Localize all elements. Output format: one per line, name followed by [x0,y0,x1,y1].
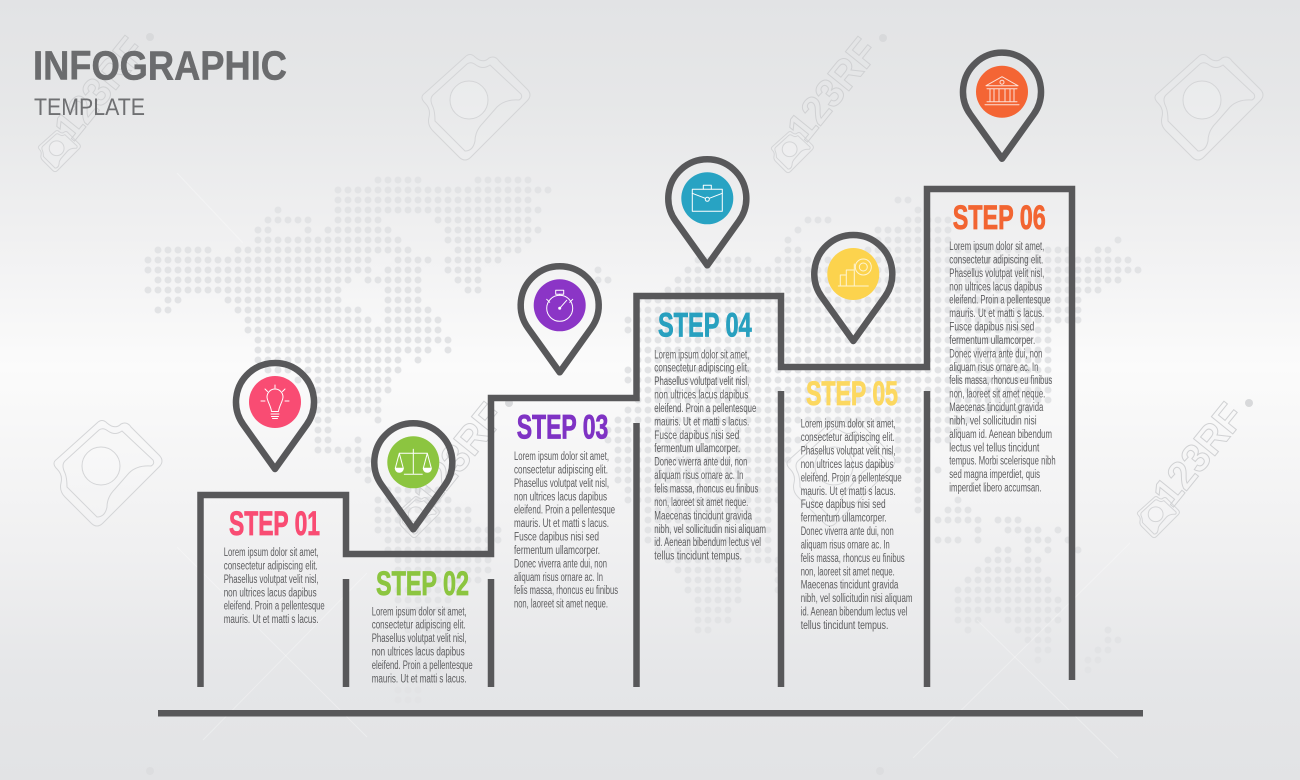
text: step 05 body: non ultrices lacus dapibus [801,459,894,471]
text: step 04 body: id. Aenean bibendum lectus vel [654,537,761,549]
text: step 04 body: tellus tincidunt tempus. [654,551,742,563]
heading: step 05: STEP 05 [806,375,898,413]
watermark: 123RF [1145,395,1253,515]
text: step 05 body: Maecenas tincidunt gravida [801,580,899,592]
heading: step 02: STEP 02 [376,565,469,603]
panel: step 03 [514,408,618,611]
heading: step 03: STEP 03 [517,408,608,446]
text: step 04 body: nibh, vel sollicitudin nisi aliquam [654,524,766,536]
text: step 06 body: tempus. Morbi scelerisque nibh [949,456,1056,468]
text: step 01 body [224,547,325,626]
text: step 06 body: Fusce dapibus nisi sed [949,322,1034,334]
text: step 05 body: id. Aenean bibendum lectus vel [801,607,907,619]
text: step 01 body: eleifend. Proin a pellentesque [224,601,325,613]
heading: infographic: INFOGRAPHIC [33,42,287,88]
text: step 02 body: eleifend. Proin a pellentesque [372,660,473,672]
text: step 01 body: consectetur adipiscing elit. [224,560,318,572]
text: step 05 body: non, laoreet sit amet neque. [801,566,895,578]
text: step 04 body: aliquam risus ornare ac. In [654,470,743,482]
text: step 04 body: Lorem ipsum dolor sit amet, [654,349,749,361]
text: step 06 body: fermentum ullamcorper. [949,335,1035,347]
pin: step 03 stopwatch [521,266,599,372]
text: step 03 body: Fusce dapibus nisi sed [514,532,599,544]
text: step 03 body: aliquam risus ornare ac. In [514,572,603,584]
text: step 04 body: felis massa, rhoncus eu finibus [654,484,758,496]
text: step 06 body: consectetur adipiscing elit. [949,254,1043,266]
text: step 06 body: aliquam risus ornare ac. In [949,362,1038,374]
pin: step 01 lightbulb [236,363,314,469]
text: step 06 body: non ultrices lacus dapibus [949,281,1042,293]
heading: step 06: STEP 06 [953,199,1046,237]
text: step 05 body: Lorem ipsum dolor sit amet, [801,419,896,431]
panel: step 01 [224,505,325,626]
text: step 06 body: non, laoreet sit amet neque. [949,389,1045,401]
text: step 06 body: Maecenas tincidunt gravida [949,402,1044,414]
panel: step 04 [654,307,766,563]
text: step 01 body: mauris. Ut et matti s lacus. [224,614,319,626]
pin: step 05 growth chart [814,235,892,341]
text: step 03 body: fermentum ullamcorper. [514,545,600,557]
text: step 02 body: Lorem ipsum dolor sit amet, [372,606,467,618]
text: step 05 body: felis massa, rhoncus eu finibus [801,553,905,565]
text: step 05 body: aliquam risus ornare ac. In [801,540,890,552]
text: step 05 body: eleifend. Proin a pellentesque [801,472,902,484]
text: step 04 body: Maecenas tincidunt gravida [654,510,752,522]
icon: stopwatch [547,290,573,321]
text: step 03 body [514,451,618,611]
text: step 02 body [372,606,473,685]
text: step 05 body: nibh, vel sollicitudin nisi aliquam [801,593,912,605]
text: step 06 body: mauris. Ut et matti s lacus. [949,308,1044,320]
text: step 03 body: mauris. Ut et matti s lacus. [514,518,609,530]
text: step 04 body: consectetur adipiscing elit. [654,363,749,375]
icon: balance scales [395,449,431,474]
text: step 01 body: Phasellus volutpat velit nisl, [224,574,319,586]
text: step 05 body: tellus tincidunt tempus. [801,620,888,632]
text: step 03 body: non, laoreet sit amet neque. [514,599,608,611]
heading: step 01: STEP 01 [229,505,320,543]
icon: briefcase [692,185,722,211]
icon: bank building [985,77,1019,105]
text: step 03 body: Donec viverra ante dui, non [514,558,607,570]
text: step 03 body: Phasellus volutpat velit nisl, [514,478,609,490]
panel: step 06 [949,199,1056,495]
text: step 06 body: Lorem ipsum dolor sit amet, [949,241,1044,253]
text: step 03 body: non ultrices lacus dapibus [514,491,607,503]
text: step 02 body: non ultrices lacus dapibus [372,647,465,659]
panel: step 05 [801,375,912,632]
text: step 05 body: consectetur adipiscing elit. [801,432,895,444]
text: step 04 body: Phasellus volutpat velit nisl, [654,376,749,388]
pin: step 06 bank [963,53,1041,159]
text: step 06 body: nibh, vel sollicitudin nisi [949,416,1037,428]
text: step 06 body: eleifend. Proin a pellentesque [949,295,1050,307]
text: step 06 body: Donec viverra ante dui, non [949,348,1042,360]
text: step 06 body: lectus vel tellus tincidunt [949,442,1040,454]
text: step 05 body: Donec viverra ante dui, non [801,526,894,538]
text: step 06 body: sed magna imperdiet, quis [949,469,1040,481]
text: step 02 body: consectetur adipiscing elit. [372,620,466,632]
dotted world map [148,180,1139,700]
text: step 04 body: Fusce dapibus nisi sed [654,430,739,442]
text: step 06 body: aliquam id. Aenean bibendum [949,429,1052,441]
text: step 05 body: Phasellus volutpat velit nisl, [801,446,896,458]
text: step 04 body: non ultrices lacus dapibus [654,390,748,402]
heading: step 04: STEP 04 [658,307,752,345]
text: step 05 body: mauris. Ut et matti s lacus. [801,486,896,498]
text: step 02 body: mauris. Ut et matti s lacus. [372,673,467,685]
panel: step 02 [372,565,473,685]
text: step 04 body: Donec viverra ante dui, non [654,457,747,469]
text: step 04 body: fermentum ullamcorper. [654,443,740,455]
title [33,42,287,121]
watermark: 123RF [779,30,887,150]
pin: step 04 briefcase [668,159,746,265]
text: step 06 body: Phasellus volutpat velit nisl, [949,268,1044,280]
text: step 04 body: non, laoreet sit amet neque. [654,497,748,509]
text: step 02 body: Phasellus volutpat velit nisl, [372,633,467,645]
subheading: template: TEMPLATE [34,94,145,121]
text: step 06 body: imperdiet libero accumsan. [949,483,1042,495]
text: step 01 body: Lorem ipsum dolor sit amet, [224,547,319,559]
text: step 04 body: eleifend. Proin a pellentesque [654,403,756,415]
text: step 06 body [949,241,1056,495]
text: step 03 body: felis massa, rhoncus eu finibus [514,585,618,597]
baseline [158,710,1143,717]
icon: lightbulb [261,385,289,418]
stepped outline [200,189,1072,687]
watermark: 123RF [405,395,513,515]
text: step 06 body: felis massa, rhoncus eu finibus [949,375,1052,387]
text: step 05 body: fermentum ullamcorper. [801,513,887,525]
text: step 05 body [801,419,912,632]
icon: chart with gear [838,259,871,286]
text: step 03 body: consectetur adipiscing elit. [514,464,608,476]
text: step 03 body: Lorem ipsum dolor sit amet, [514,451,609,463]
text: step 05 body: Fusce dapibus nisi sed [801,499,886,511]
text: step 03 body: eleifend. Proin a pellentesque [514,505,615,517]
watermark: 123RF [46,29,154,149]
pin: step 02 scales [374,423,452,529]
text: step 01 body: non ultrices lacus dapibus [224,587,317,599]
text: step 04 body [654,349,766,563]
text: step 04 body: mauris. Ut et matti s lacus. [654,416,749,428]
